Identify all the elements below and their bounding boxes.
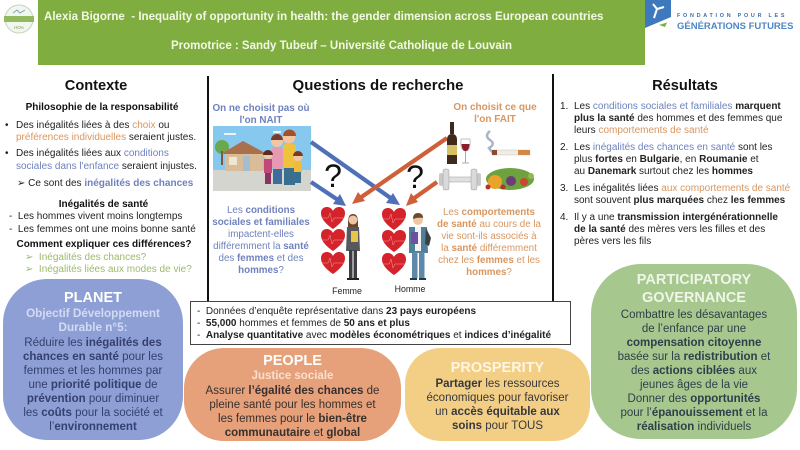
governance text [618,309,770,433]
divider left [207,76,209,302]
label: on choisit [453,102,537,125]
governance title: PARTICIPATORY [637,272,751,288]
question mark right: ? [406,159,424,195]
text: conditions question: différemment la santé [213,241,309,252]
governance text: pour l’épanouissement et la [620,407,768,419]
result 1: 1. [560,101,568,112]
logo: circular health badge [4,4,34,34]
planet subtitle: Objectif Développement [26,307,160,320]
people text: pleine santé pour les hommes et [209,399,376,411]
people text [206,385,379,439]
label: on choisit: On choisit ce que [453,102,537,113]
text: comportements question: Les comportements [443,207,535,218]
list: inégalités de santé [9,211,196,235]
governance text: réalisation individuels [637,421,751,433]
list: explications [25,252,192,275]
panel: résultats: pères vers les fils [574,236,651,247]
bullet: conditions [5,148,197,172]
prosperity title: PROSPERITY [451,360,544,376]
panel: résultats: plus la santé des hommes et des femmes que [574,113,782,124]
result 3: 3. [560,183,568,194]
label: Femme: Femme [332,286,362,296]
divider right [552,74,554,302]
list: explications: ➢ Inégalités des chances? [25,252,146,263]
people text: les femmes pour le bien-être [218,413,367,425]
people subtitle: Justice sociale [252,370,333,382]
panel: PARTICIPATORY GOVERNANCE [591,264,797,439]
bullet: choix: Des inégalités liées à des choix ou [16,120,169,131]
foundation name: GÉNÉRATIONS FUTURES [677,21,793,32]
icon: vegetables [486,168,534,190]
arrow: orange to homme [406,182,437,206]
panel: résultats: sont souvent plus marquées chez les femmes [574,195,785,206]
panel: résultats: Les inégalités des chances en santé sont les [574,142,772,153]
governance title: GOVERNANCE [642,290,746,306]
bullet: conditions: Des inégalités liées aux conditions [16,148,169,159]
label: on choisit: l'on FAIT [474,114,516,125]
result 2 [560,142,772,177]
text: conditions question: hommes? [238,265,284,276]
arrow: blue to femme [311,182,346,206]
data box [190,301,571,345]
foundation name [677,13,794,32]
foundation name: FONDATION POUR LES [677,13,787,19]
governance text: de l’enfance par une [642,323,746,335]
label: Homme: Homme [395,284,425,294]
result 4 [560,212,778,247]
result 2: 2. [560,142,568,153]
bullet: choix: • [5,120,9,131]
result 4: 4. [560,212,568,223]
people text: communautaire et global [225,427,360,439]
planet text: chances en santé pour les [23,351,163,363]
header supervisor line: Promotrice : Sandy Tubeuf – Université Catholique de Louvain [171,40,512,52]
panel: résultats: Les inégalités liées aux comportements de santé [574,183,790,194]
arrows [310,136,448,206]
header banner [38,0,645,65]
panel: résultats [560,101,790,247]
panel: résultats: plus fortes en Bulgarie, en Roumanie et [574,154,759,165]
prosperity text [427,378,568,432]
heading: Résultats: Résultats [652,78,718,94]
illustration: family and house [213,126,311,191]
logo: circular health badge: HOA [14,25,24,30]
panel: résultats: Les conditions sociales et familiales marquent [574,101,781,112]
hearts: femme [321,207,345,274]
text: comportements question: la santé différemment [441,243,537,254]
bullet: conditions: sociales dans l'enfance seraient injustes. [16,161,197,172]
arrow: blue to homme [311,142,400,205]
arrow: orange to femme [352,138,447,204]
list: inégalités de santé: - Les hommes vivent moins longtemps [9,211,182,222]
planet text: une priorité politique de [28,379,158,391]
label: on ne choisit pas: On ne choisit pas où [212,103,310,114]
governance title [637,272,751,306]
governance text: Donner des opportunités [628,393,760,405]
bullet: choix [5,120,196,143]
subheading: inégalités de santé: Inégalités de santé [59,199,148,210]
planet text: Réduire les inégalités des [24,337,162,349]
figure: homme [409,213,431,280]
governance text: basée sur la redistribution et [618,351,770,363]
text: comportements question: de santé au cours de la [437,219,541,230]
hearts: homme [382,208,406,275]
text: conditions question [212,205,310,276]
text: comportements question [437,207,541,278]
header title: Alexia Bigorne - Inequality of opportunity in health: the gender dimension across European countries [44,11,603,23]
logo: foundation mark [645,0,671,28]
bullet: conditions: • [5,148,9,159]
subheading: comment expliquer: Comment expliquer ces différences? [16,239,192,250]
governance text: des actions ciblées aux [631,365,757,377]
text: comportements question: hommes? [466,267,512,278]
governance text: jeunes âges de la vie [640,379,748,391]
planet subtitle: Durable n°5: [59,321,127,334]
heading: Questions de recherche: Questions de recherche [293,77,463,94]
heading: Contexte: Contexte [65,78,127,94]
panel: résultats: Il y a une transmission intergénérationnelle [574,212,778,223]
icon: dumbbell [439,168,481,190]
governance text: compensation citoyenne [627,337,761,349]
text: conditions question: Les conditions [227,205,295,216]
panel: PLANET [3,279,183,440]
planet text: femmes et les hommes par [24,365,162,377]
planet title: PLANET [64,290,122,306]
planet text: prévention pour diminuer [27,393,159,405]
panel: résultats: leurs comportements de santé [574,125,709,136]
planet subtitle [26,307,160,334]
list: explications: ➢ Inégalités liées aux modes de vie? [25,264,192,275]
planet text [23,337,163,433]
prosperity text: soins pour TOUS [452,420,543,432]
people text: Assurer l’égalité des chances de [206,385,379,397]
question mark left: ? [324,158,342,194]
list: inégalités de santé: - Les femmes ont une moins bonne santé [9,224,196,235]
icon: cigarette [486,130,530,156]
figure: femme [346,214,360,280]
prosperity text: économiques pour favoriser [427,392,568,404]
text: conditions question: des femmes et des [218,253,303,264]
panel: résultats: de la santé des mères vers les filles et des [574,224,765,235]
text: comportements question: vie sont-ils associés à [441,231,537,242]
people title: PEOPLE [263,353,322,369]
governance text: Combattre les désavantages [621,309,767,321]
conclusion: inégalités des chances: ➢ Ce sont des inégalités des chances [17,178,193,189]
subheading: philosophie: Philosophie de la responsabilité [26,102,178,113]
panel: PEOPLE [184,348,401,441]
planet text: les coûts pour la société et [23,407,163,419]
text: conditions question: sociales et familiales [212,217,310,228]
text: comportements question: chez les femmes et les [438,255,540,266]
data box: - Données d’enquête représentative dans 23 pays européens [197,306,476,317]
icon: wine bottle and glass [447,122,470,164]
result 3 [560,183,790,206]
data box: - 55,000 hommes et femmes de 50 ans et plus [197,318,410,329]
prosperity text: Partager les ressources [435,378,560,390]
text: conditions question: impactent-elles [228,229,294,240]
data box: - Analyse quantitative avec modèles économétriques et indices d’inégalité [197,330,551,341]
bullet: choix: préférences individuelles seraient justes. [16,132,196,143]
result 1 [560,101,782,136]
panel: résultats: au Danemark surtout chez les hommes [574,166,753,177]
panel: PROSPERITY [405,348,590,441]
prosperity text: un accès équitable aux [435,406,560,418]
panel: contexte [5,102,197,275]
label: on ne choisit pas: l'on NAIT [240,115,282,126]
planet text: l’environnement [49,421,137,433]
label: on ne choisit pas [212,103,310,126]
